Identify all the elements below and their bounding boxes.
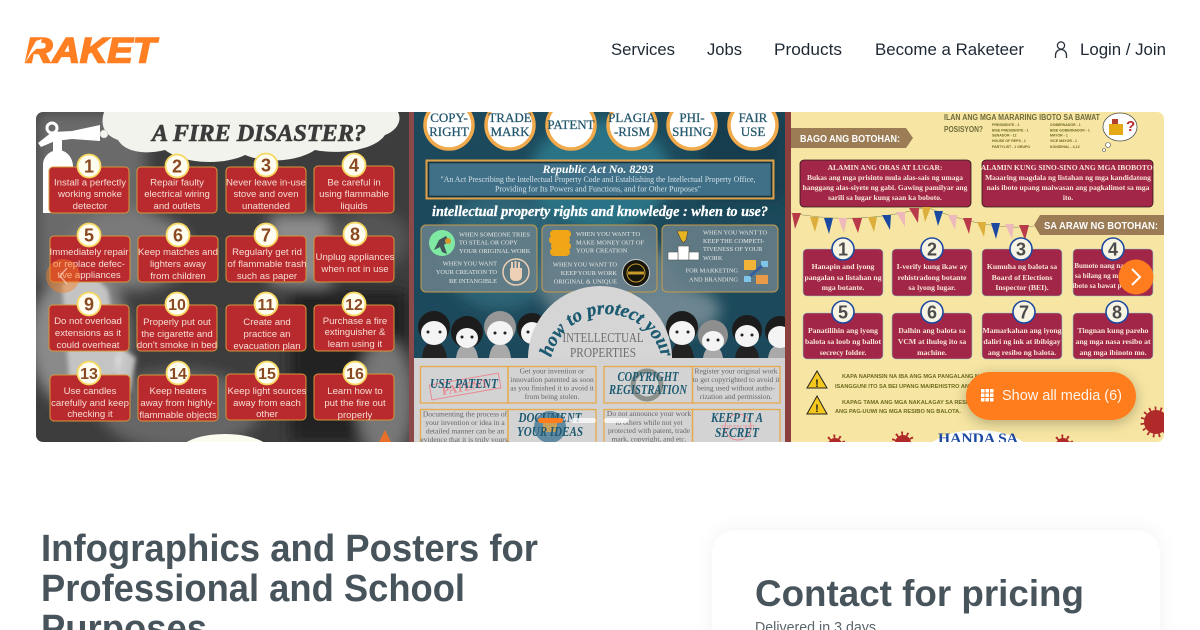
banner: bago ang botohan — [791, 128, 913, 148]
warning notes — [806, 370, 979, 414]
panel: voting guide poster: rehistradong botante — [898, 273, 967, 282]
republic act box — [426, 160, 774, 198]
panel: intellectual property poster: WHEN YOU WANT TO — [576, 231, 640, 238]
protection descriptions: being used without autho- — [697, 384, 776, 392]
panel: voting guide poster: Dalhin ang balota sa — [898, 326, 966, 335]
ballot count question: GOBERNADOR - 1 — [1050, 123, 1081, 127]
republic act box: Republic Act No. 8293 — [542, 162, 653, 176]
step boxes — [803, 249, 1153, 359]
panel: intellectual property poster: USE — [741, 124, 765, 139]
tip text: Create and — [243, 317, 291, 328]
panel: voting guide poster: sa bilang ng maaaring — [1075, 272, 1142, 280]
panel: voting guide poster: 3 — [1016, 240, 1026, 260]
panel: fire disaster poster — [30, 112, 414, 470]
icon: marketing — [744, 260, 768, 284]
panel: fire disaster poster: 13 — [80, 366, 98, 383]
tip text: detector — [73, 201, 108, 212]
icon: thief — [429, 230, 455, 256]
panel: voting guide poster: iboto sa bawat posisyon — [1073, 282, 1143, 290]
tip text: of flammable trash — [228, 259, 306, 270]
panel: fire disaster poster: 14 — [169, 366, 187, 383]
tip text: Use candles — [64, 386, 117, 397]
panel: intellectual property poster: PHI- — [679, 110, 705, 125]
carousel dots — [538, 418, 629, 423]
panel: voting guide poster: I-verify kung ikaw ay — [897, 262, 967, 271]
protection headings: SECRET — [715, 426, 760, 441]
banner: bago ang botohan: BAGO ANG BOTOHAN: — [800, 133, 900, 145]
bottom seal: handa sa: HANDA SA — [938, 431, 1018, 447]
header logo: RAKET: RAKET — [25, 32, 159, 70]
tip text: Install a perfectly — [54, 178, 126, 188]
tip text: working smoke — [57, 189, 122, 200]
panel: intellectual property poster: WHEN YOU WANT TO — [553, 262, 617, 268]
ballot count question: VICE MAYOR - 1 — [1050, 139, 1077, 143]
panel: voting guide poster: 6 — [927, 302, 937, 322]
tip text: extensions as it — [55, 328, 121, 339]
icon: gold coins — [549, 230, 571, 256]
protection headings: KEEP IT A — [710, 411, 763, 426]
panel: voting guide poster: Bukas ang mga prisinto mula alas-sais ng umaga — [807, 173, 963, 182]
panel: voting guide poster: 8 — [1112, 302, 1122, 322]
navigation menu: Jobs — [707, 40, 742, 59]
subheading: when to use: intellectual property rights and knowledge : when to use? — [432, 204, 768, 220]
protection headings: USE PATENT — [430, 377, 499, 392]
protection descriptions: from being stolen. — [525, 392, 580, 401]
warning notes: ANG PAG-UUWI NG MGA RESIBO NG BALOTA. — [835, 409, 961, 415]
panel: intellectual property poster: WHEN YOU WANT TO — [703, 230, 767, 236]
panel: voting guide poster: ito. — [1063, 193, 1073, 202]
ballot count question: POSISYON? — [944, 125, 983, 134]
panel: intellectual property poster: WHEN SOMEONE TRIES — [459, 232, 530, 238]
panel: fire disaster poster: 15 — [258, 366, 276, 383]
panel: voting guide poster: sa iyong lugar. — [908, 283, 956, 292]
when to use cards — [421, 225, 778, 292]
pricing card — [712, 530, 1160, 630]
tip text: electrical wiring — [144, 189, 210, 200]
panel: intellectual property poster: MARK — [490, 124, 530, 139]
tip text: Keep light sources — [228, 386, 307, 397]
protection headings — [430, 370, 763, 441]
term badges — [423, 112, 779, 151]
warning notes: ! — [815, 403, 819, 415]
panel: intellectual property poster: SHING — [672, 124, 712, 139]
panel: voting guide poster: ang mga ibinoto mo. — [1079, 348, 1147, 357]
ballot count question: ILAN ANG MGA MARARING IBOTO SA BAWAT — [944, 113, 1100, 122]
protection headings: YOUR IDEAS — [517, 425, 583, 440]
panel: voting guide poster: VCM at ihulog ito sa — [898, 337, 966, 346]
panel: voting guide poster: ALAMIN ANG ORAS AT LUGAR: — [828, 163, 942, 172]
tip text: and outlets — [154, 201, 201, 212]
panel: intellectual property poster: ORIGINAL & UNIQUE — [554, 278, 617, 286]
number badges — [78, 154, 366, 384]
warning notes: ISANGGUNI ITO SA BEI UPANG MAIREHISTRO ANG IYONG BOTO. — [835, 384, 1012, 390]
navigation menu: Services — [611, 40, 675, 59]
navigation menu: Products — [774, 40, 842, 59]
ballot count question: BISE PRESIDENTE - 1 — [992, 128, 1029, 132]
panel: voting guide poster: 4 — [1108, 240, 1118, 260]
cartoon people — [418, 311, 795, 358]
panel: intellectual property poster: WHEN YOU WANT — [443, 260, 497, 268]
panel: intellectual property poster: KEEP YOUR WORK — [561, 270, 617, 277]
panel: voting guide poster: hanggang alas-siyete ng gabi. Gawing pamilyar ang — [803, 183, 968, 192]
protection tips section — [414, 358, 786, 442]
tip text: other — [256, 409, 279, 420]
tip text: stove and oven — [233, 189, 299, 200]
protection headings: COPYRIGHT — [618, 370, 680, 385]
ballot count question — [944, 113, 1100, 149]
banner: sa araw ng botohan: SA ARAW NG BOTOHAN: — [1044, 220, 1158, 232]
protection descriptions: detailed manner can be an — [426, 426, 504, 436]
how to protect arch: INTELLECTUAL — [562, 331, 644, 346]
protection descriptions: evidence that it is truly yours. — [420, 435, 510, 444]
panel: fire disaster poster: 4 — [349, 156, 359, 176]
panel: voting guide poster: sarili sa lugar kung saan ka boboto. — [828, 193, 942, 202]
panel: voting guide poster: Bumoto nang naaayon — [1074, 262, 1142, 270]
how to protect arch: PROPERTIES — [570, 346, 636, 361]
panel: voting guide poster: ang resibo ng balota. — [988, 348, 1056, 357]
panel: intellectual property poster: COPY- — [430, 110, 468, 125]
stamps — [429, 371, 756, 443]
panel: intellectual property poster: WORK — [703, 255, 723, 262]
tip text: away from each — [233, 398, 301, 409]
ballot count question: KONSEHAL - 4-12 — [1050, 145, 1080, 149]
ballot count question: PARTYLIST - 1 GRUPO — [992, 145, 1030, 149]
icon: trophy podium — [668, 231, 699, 260]
panel: voting guide poster — [785, 112, 1164, 442]
panel: fire disaster poster: 5 — [84, 226, 94, 246]
tip text: evacuation plan — [233, 341, 301, 352]
protection boxes — [420, 366, 780, 450]
panel: intellectual property poster: RIGHT — [429, 124, 469, 139]
ghost previous button — [46, 259, 80, 293]
tip text: Keep heaters — [149, 386, 207, 397]
tip text: practice an — [244, 329, 290, 340]
stamps: TOP SECRET — [721, 425, 756, 431]
bunting flags — [791, 207, 1034, 240]
panel: voting guide poster: 5 — [838, 302, 848, 322]
panel: fire disaster poster: 11 — [258, 297, 275, 314]
icon: grid — [981, 389, 994, 402]
heading: a fire disaster: A FIRE DISASTER? — [150, 121, 366, 147]
protection descriptions — [420, 366, 780, 444]
panel: fire disaster poster: 3 — [261, 156, 271, 176]
protection headings: REGISTRATION — [608, 383, 688, 398]
title: Infographics and Posters for — [41, 528, 538, 570]
tip text: Properly put out — [143, 317, 211, 328]
title: Professional and School — [41, 568, 465, 610]
tip text: could overheat — [57, 340, 120, 351]
tip text: properly — [338, 410, 373, 421]
tip text: learn using it — [328, 339, 383, 350]
title — [41, 528, 538, 630]
panel: voting guide poster: Maaaring magdala ng listahan ng mga kandidatong — [985, 173, 1151, 182]
protection descriptions: to others while not yet — [615, 418, 683, 427]
navigation menu: Login / Join — [1080, 40, 1166, 59]
protection descriptions: to get copyrighted to avoid it — [693, 375, 780, 384]
tip text: flammable objects — [139, 410, 217, 421]
panel: intellectual property poster: YOUR ORIGINAL WORK — [459, 248, 531, 255]
tip text: lighters away — [150, 259, 206, 270]
tip text: from children — [150, 271, 206, 282]
navigation menu — [611, 40, 1166, 59]
panel: voting guide poster: Board of Elections — [992, 273, 1052, 282]
how to protect arch: how to protect your — [538, 304, 671, 358]
tip text: such as paper — [237, 271, 298, 282]
protection descriptions: rization and permission. — [700, 392, 772, 401]
ballot count question: SENADOR - 12 — [992, 134, 1017, 138]
ballot count question: MAYOR - 1 — [1050, 134, 1068, 138]
tip text: carefully and keep — [51, 398, 129, 409]
virus decorations — [825, 406, 1164, 442]
panel: voting guide poster: 1 — [838, 240, 848, 260]
protection descriptions: Do not announce your work — [607, 409, 691, 418]
protection descriptions: Documenting the process of — [423, 410, 508, 418]
show all media button: Show all media (6) — [1002, 387, 1122, 404]
ballot count question: PRESIDENTE - 1 — [992, 123, 1019, 127]
icon: stop hand — [503, 259, 529, 285]
icon: fire extinguisher — [38, 123, 108, 213]
tip text: tive appliances — [57, 270, 121, 281]
panel: voting guide poster: Tingnan kung pareho — [1077, 326, 1149, 335]
tip text: checking it — [67, 409, 113, 420]
icon: original seal — [622, 260, 650, 286]
panel: intellectual property poster: -RISM — [614, 124, 650, 139]
tip text: put the fire out — [324, 398, 386, 409]
show all media button — [966, 372, 1136, 420]
panel: intellectual property poster: PATENT — [547, 117, 595, 132]
panel: intellectual property poster: AND BRANDING — [689, 276, 738, 284]
tip text: using flammable — [319, 189, 389, 200]
panel: fire disaster poster: 8 — [350, 224, 360, 244]
info boxes — [800, 160, 1153, 207]
panel: voting guide poster: Panatilihin ang iyong — [808, 326, 878, 335]
protection descriptions: Register your original work — [694, 366, 778, 376]
tip text: Learn how to — [327, 386, 383, 397]
tip text: Purchase a fire — [323, 316, 387, 327]
banner: sa araw ng botohan — [1034, 215, 1164, 235]
panel: voting guide poster: daliri ng ink at ibibigay — [983, 337, 1061, 346]
panel: intellectual property poster: BE INTANGIBLE — [449, 278, 497, 285]
republic act box: Providing for Its Powers and Functions, and for Other Purposes" — [495, 184, 701, 194]
tip text: Unplug appliances — [316, 252, 395, 263]
panel: voting guide poster: 7 — [1019, 302, 1029, 322]
panel: intellectual property poster: FOR MARKETING — [686, 268, 738, 274]
tip text: Do not overload — [54, 316, 122, 327]
tip text: unattended — [242, 201, 290, 212]
panel: fire disaster poster: 7 — [261, 226, 271, 246]
icon: thought bubble with ballot box — [1102, 113, 1137, 152]
protection descriptions: your invention or idea in a — [425, 418, 505, 427]
warning notes: ! — [815, 378, 819, 390]
protection descriptions: innovation patented as soon — [510, 375, 594, 384]
cloud — [103, 112, 399, 162]
icon: user — [1056, 42, 1066, 58]
tip text: Regularly get rid — [232, 247, 302, 258]
panel: voting guide poster: Kumuha ng balota sa — [987, 262, 1057, 271]
panel: fire disaster poster: 10 — [168, 297, 186, 314]
protection headings: DOCUMENT — [518, 411, 583, 426]
tip text: the cigarette and — [141, 329, 213, 340]
panel: voting guide poster: Mamarkahan ang iyong — [982, 326, 1062, 335]
panel: voting guide poster: mga botante. — [822, 283, 864, 292]
ballot count question: HOUSE OF REPS - 1 — [992, 139, 1026, 143]
panel: intellectual property poster: TIVENESS OF YOUR — [703, 246, 763, 253]
panel: intellectual property poster: TO STEAL OR COPY — [459, 240, 518, 246]
protection descriptions: as you finished it to avoid it — [510, 384, 595, 392]
protection descriptions: mark, copyright, and etc. — [612, 434, 687, 444]
panel: voting guide poster: machine. — [917, 348, 947, 357]
navigation menu: Become a Raketeer — [875, 40, 1024, 59]
panel: voting guide poster: 2 — [927, 240, 937, 260]
tip text: Immediately repair — [50, 247, 129, 258]
panel: voting guide poster: ang mga nasa resibo at — [1075, 337, 1151, 346]
panel: fire disaster poster: 12 — [345, 297, 363, 314]
panel: intellectual property poster: KEEP THE COMPETI- — [703, 238, 764, 245]
panel: fire disaster poster: 16 — [346, 366, 364, 383]
pricing card: Contact for pricing — [755, 573, 1084, 614]
tip text: Never leave in-use — [226, 178, 306, 188]
tip text: when not in use — [320, 264, 389, 275]
panel: intellectual property poster: MAKE MONEY OUT OF — [576, 240, 644, 246]
bottom seal: handa sa — [933, 430, 1023, 442]
tip text: or replace defec- — [53, 259, 125, 270]
panel: voting guide poster: Hanapin and iyong — [812, 262, 875, 271]
protection descriptions: Get your invention or — [520, 366, 585, 376]
protection descriptions: protected with patent, trade — [608, 426, 691, 435]
panel: voting guide poster: ALAMIN KUNG SINO-SINO ANG MGA IBOBOTO: — [981, 163, 1155, 172]
tip text: liquids — [340, 201, 368, 212]
republic act box: "An Act Prescribing the Intellectual Property Code and Establishing the Intellectual Property Office, — [440, 175, 756, 184]
warning notes: KAPA NAPANSIN NA IBA ANG MGA PANGALANG NAKALAGAY SA BALOTA, — [842, 374, 1046, 380]
stamps: PATENT — [441, 376, 489, 398]
step number badges — [832, 238, 1128, 323]
tip text: Be careful in — [327, 178, 381, 188]
panel: fire disaster poster: 1 — [84, 156, 94, 176]
media gallery — [36, 112, 1164, 442]
panel: intellectual property poster: FAIR — [739, 110, 768, 125]
panel: voting guide poster: Inspector (BEI). — [995, 283, 1049, 292]
tip text: away from highly- — [140, 398, 216, 409]
panel: intellectual property poster — [414, 112, 785, 442]
warning notes: KAPAG TAMA ANG MGA NAKALAGAY SA RESIBO, IHULOG ITO AT ITULOY ANG — [842, 400, 1056, 406]
panel: intellectual property poster: YOUR CREATION — [576, 248, 628, 254]
panel: fire disaster poster: 6 — [173, 226, 183, 246]
panel: intellectual property poster: YOUR CREATION TO — [436, 269, 497, 276]
tip boxes — [49, 166, 394, 421]
panel: voting guide poster: nais iboto upang maiwasan ang pagkalimot sa mga — [987, 183, 1150, 192]
panel: fire disaster poster: 2 — [172, 156, 182, 176]
panel: intellectual property poster: TRADE — [488, 110, 532, 125]
panel: intellectual property poster: PLAGIA — [608, 110, 656, 125]
tip text: don't smoke in bed — [137, 340, 217, 351]
next arrow button — [1118, 260, 1154, 294]
panel: voting guide poster: balota sa loob ng ballot — [805, 337, 881, 346]
ballot count question: BISE GOBERNADOR - 1 — [1050, 128, 1090, 132]
tip text: extinguisher & — [325, 327, 386, 338]
panel: voting guide poster: secrecy folder. — [820, 348, 866, 357]
tip text — [50, 178, 395, 421]
icon: thought bubble with ballot box: ? — [1126, 118, 1135, 135]
panel: voting guide poster: pangalan sa listahan ng — [804, 273, 882, 282]
tip text: Keep matches and — [138, 247, 218, 258]
tip text: Repair faulty — [150, 178, 204, 188]
panel: fire disaster poster: 9 — [84, 294, 94, 314]
